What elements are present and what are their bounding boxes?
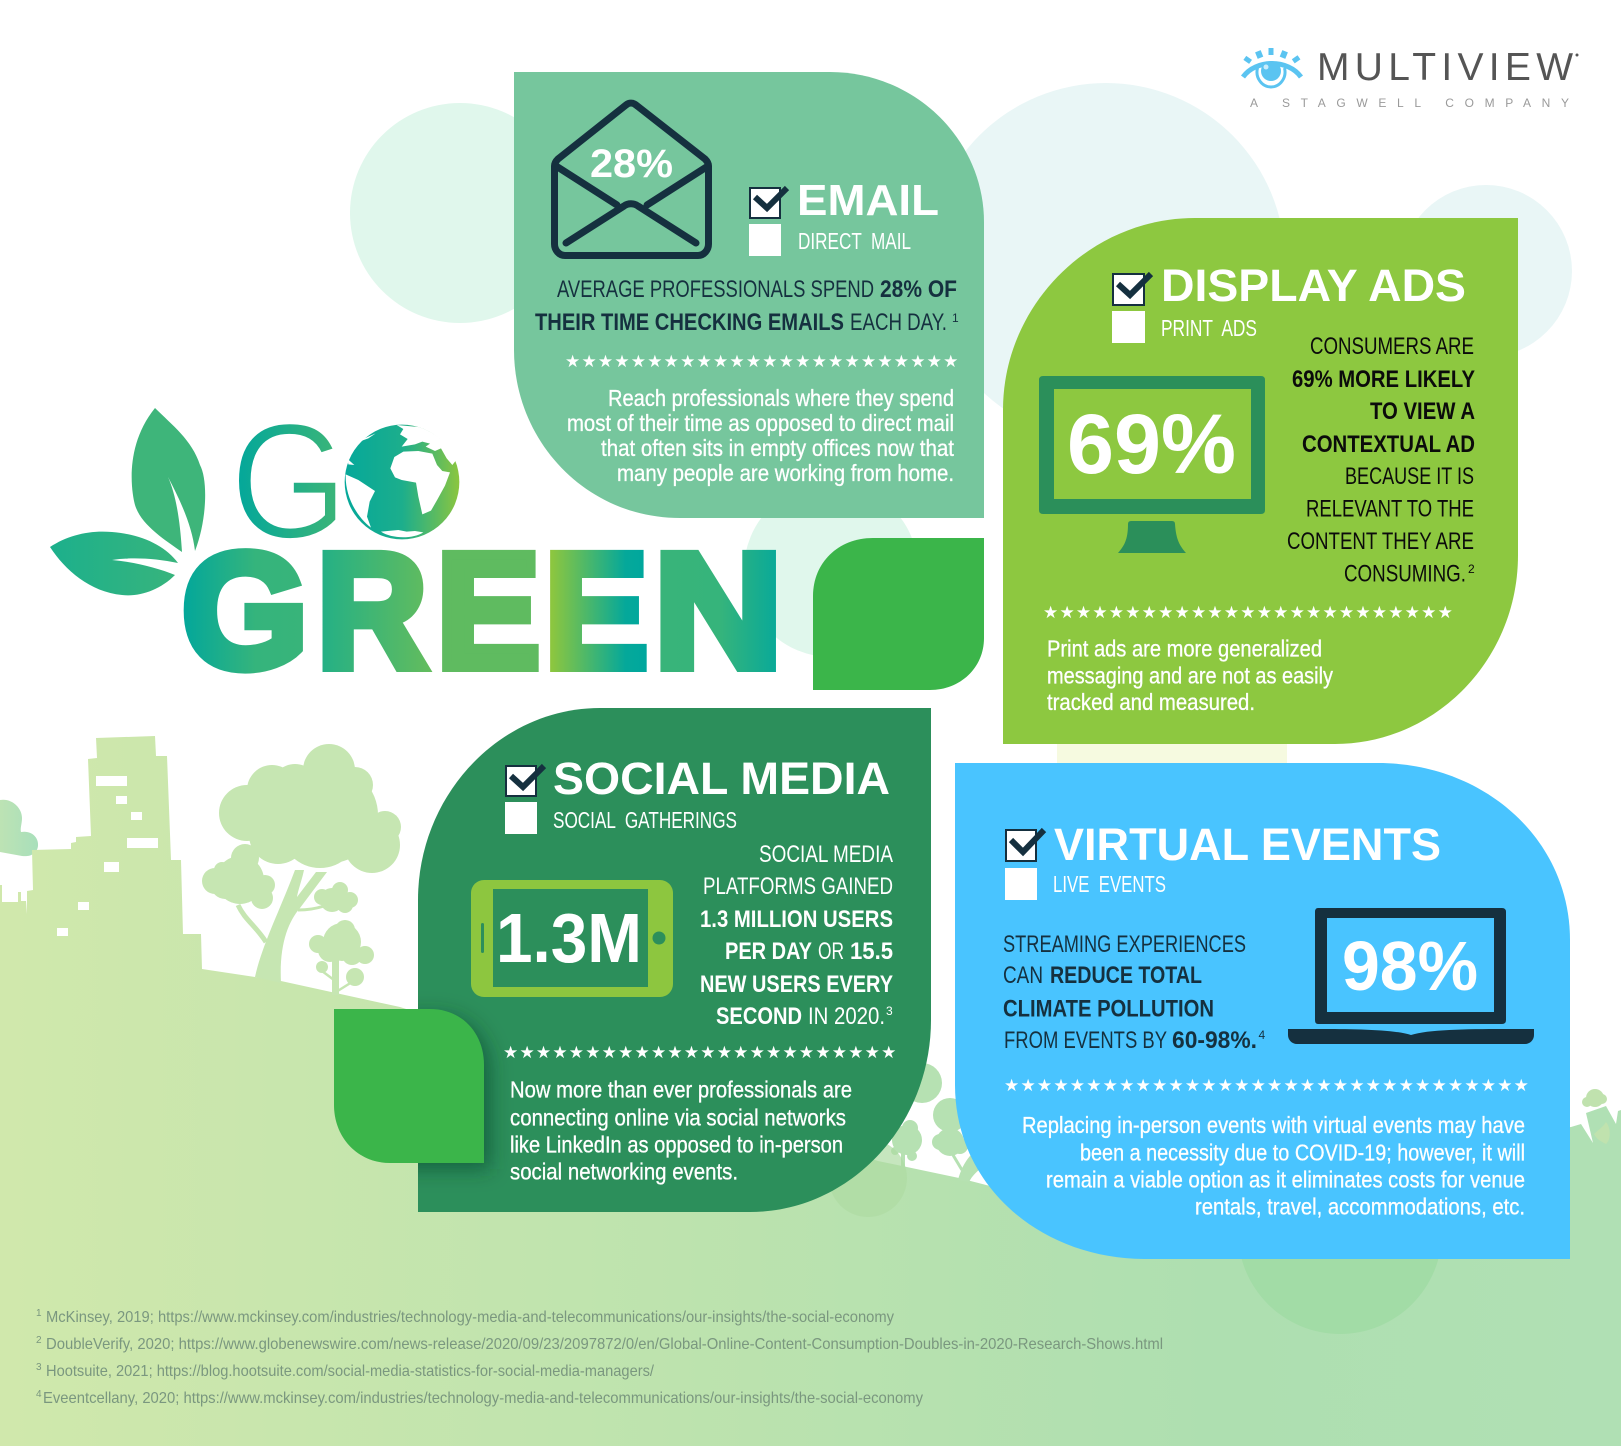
panel: display ads (1003, 218, 1518, 744)
panel: email (514, 72, 984, 518)
display stat text: CONTENT THEY ARE (1287, 528, 1474, 555)
footnotes (36, 1308, 1163, 1407)
email body text: most of their time as opposed to direct mail (567, 410, 954, 436)
virtual stat text (1003, 931, 1266, 1054)
icon: upper leaf (132, 408, 205, 552)
footnotes: 2 (36, 1335, 42, 1346)
checkbox empty (749, 224, 781, 256)
icon: monitor (1039, 376, 1265, 553)
panel: social media (418, 708, 931, 1212)
footnotes: Hootsuite, 2021; https://blog.hootsuite.com/social-media-statistics-for-social-media-managers/ (46, 1363, 655, 1380)
display stat text: RELEVANT TO THE (1306, 496, 1474, 522)
leaf shape (334, 1009, 484, 1163)
footnotes: 3 (36, 1362, 42, 1373)
virtual body text (1022, 1112, 1525, 1220)
icon: lower leaf (50, 532, 178, 595)
social body text: connecting online via social networks (510, 1104, 846, 1130)
icon: phone (471, 880, 673, 997)
checkbox empty (1005, 868, 1037, 900)
word: GREEN (182, 519, 782, 702)
footnotes: 1 (36, 1308, 42, 1319)
hill and buildings (0, 736, 1621, 1446)
trees right gap (887, 1063, 985, 1182)
heading: social media: SOCIAL MEDIA (553, 753, 890, 804)
phone stat: 1.3M (496, 899, 642, 977)
subheading: print ads: PRINT ADS (1161, 315, 1257, 341)
email body text (567, 385, 955, 486)
word: GREEN: R (317, 519, 427, 702)
social stat text: OR (818, 938, 844, 965)
trees right edge blobs (1582, 1089, 1610, 1144)
virtual body text: Replacing in-person events with virtual events may have (1022, 1112, 1525, 1138)
heading: email: EMAIL (797, 177, 939, 225)
hill circle bottom right (1238, 1130, 1442, 1334)
logo wordmark: MULTIVIEW (1317, 46, 1573, 89)
logo: Multiview (1243, 46, 1578, 110)
heading: display ads: DISPLAY ADS (1161, 260, 1466, 311)
social body text: social networking events. (510, 1158, 738, 1184)
social stat text: 3 (886, 1004, 893, 1018)
social stat text: NEW USERS EVERY (700, 971, 893, 998)
virtual stat text: FROM EVENTS BY (1004, 1027, 1167, 1054)
icon: envelope (554, 103, 708, 256)
display body text: messaging and are not as easily (1047, 662, 1333, 688)
word: GO letter G: G (230, 389, 348, 573)
icon: laptop (1288, 908, 1534, 1044)
social stat text: PER DAY (725, 938, 812, 965)
logo registered mark (1576, 54, 1578, 56)
social stat text (700, 841, 893, 1030)
stars divider: ★★★★★★★★★★★★★★★★★★★★★★★★★ (1043, 603, 1454, 623)
footnotes: DoubleVerify, 2020; https://www.globenewswire.com/news-release/2020/09/23/2097872/0/en/Global-Online-Content-Consumption-Doubles-in-2020-Research-Shows.html (46, 1336, 1163, 1353)
subheading: live events: LIVE EVENTS (1053, 871, 1166, 897)
virtual panel shape (955, 763, 1570, 1259)
checkbox checked (506, 766, 544, 796)
display stat text: 69% MORE LIKELY (1292, 366, 1475, 393)
email stat text: THEIR TIME CHECKING EMAILS (535, 309, 844, 336)
email stat text: AVERAGE PROFESSIONALS SPEND (557, 276, 874, 303)
email panel shape (514, 72, 984, 518)
subheading: social gatherings: SOCIAL GATHERINGS (553, 807, 737, 833)
email body text: Reach professionals where they spend (608, 385, 954, 411)
display body text (1047, 636, 1333, 715)
word: GREEN: N (654, 519, 782, 702)
email stat text (535, 276, 959, 336)
hill circles (829, 1139, 907, 1217)
checkbox empty (505, 802, 537, 834)
social stat text: IN 2020. (808, 1003, 885, 1030)
virtual stat text: REDUCE TOTAL (1050, 962, 1202, 989)
display body text: Print ads are more generalized (1047, 636, 1322, 662)
envelope stat: 28% (590, 142, 673, 186)
display stat text: BECAUSE IT IS (1345, 463, 1474, 490)
email body text: that often sits in empty offices now that (601, 435, 955, 461)
decorative leaf: lower green with shadow (334, 1009, 490, 1169)
virtual body text: been a necessity due to COVID-19; however, it will (1080, 1140, 1525, 1166)
laptop stat: 98% (1342, 927, 1478, 1005)
display body text: tracked and measured. (1047, 689, 1255, 715)
display stat text: CONSUMERS ARE (1310, 333, 1474, 360)
footnotes: 4 (36, 1389, 42, 1400)
monitor stat: 69% (1067, 397, 1236, 491)
social body text: Now more than ever professionals are (510, 1076, 852, 1102)
footnotes: Eveentcellany, 2020; https://www.mckinsey.com/industries/technology-media-and-telecommunications/our-insights/the-social-economy (43, 1390, 923, 1407)
panel: virtual events (955, 763, 1570, 1259)
social stat text: SOCIAL MEDIA (759, 841, 893, 868)
social stat text: PLATFORMS GAINED (703, 873, 893, 900)
social stat text: 15.5 (850, 938, 893, 965)
virtual body text: rentals, travel, accommodations, etc. (1195, 1194, 1525, 1220)
display stat text: TO VIEW A (1370, 398, 1475, 425)
stars divider: ★★★★★★★★★★★★★★★★★★★★★★★★ (565, 352, 960, 372)
email body text: many people are working from home. (617, 460, 954, 486)
email stat text: EACH DAY. (850, 309, 947, 336)
cloud tree at left edge (0, 800, 38, 856)
social stat text: 1.3 MILLION USERS (700, 906, 893, 933)
leaf shadow on social panel (418, 1006, 499, 1178)
checkbox empty (1112, 311, 1145, 343)
decorative leaf: upper green (813, 538, 984, 690)
checkbox checked (1006, 830, 1044, 861)
display stat text: 2 (1468, 562, 1475, 576)
word: GREEN: E (544, 519, 648, 702)
building windows (57, 776, 158, 936)
background circles (350, 83, 1572, 768)
virtual stat text: 4 (1258, 1028, 1266, 1042)
virtual stat text: 60-98%. (1172, 1027, 1257, 1054)
icon: globe (345, 425, 459, 539)
logo tagline: A STAGWELL COMPANY (1250, 96, 1569, 110)
stars divider: ★★★★★★★★★★★★★★★★★★★★★★★★ (503, 1043, 898, 1063)
social body text: like LinkedIn as opposed to in-person (510, 1132, 843, 1158)
display panel shape (1003, 218, 1518, 744)
email stat text: 1 (952, 311, 959, 325)
social body text (510, 1076, 852, 1184)
heading: virtual events: VIRTUAL EVENTS (1054, 819, 1441, 870)
landscape: city, hill and trees (0, 736, 1621, 1446)
virtual stat text: CLIMATE POLLUTION (1003, 996, 1214, 1022)
social panel shape (418, 708, 931, 1212)
trees left group (202, 744, 401, 995)
virtual stat text: CAN (1003, 962, 1043, 989)
checkbox checked (1113, 274, 1151, 305)
social stat text: SECOND (716, 1003, 802, 1030)
word: GREEN: G (182, 519, 308, 702)
icon: eye (1243, 48, 1301, 87)
display stat text: CONSUMING. (1344, 560, 1466, 588)
virtual stat text: STREAMING EXPERIENCES (1003, 931, 1246, 958)
checkbox checked (750, 188, 787, 218)
stars divider: ★★★★★★★★★★★★★★★★★★★★★★★★★★★★★★★★ (1004, 1076, 1530, 1096)
title: Go Green (50, 389, 782, 702)
word: GREEN: E (436, 519, 540, 702)
display stat text (1287, 333, 1475, 588)
email stat text: 28% OF (880, 276, 957, 303)
display stat text: CONTEXTUAL AD (1302, 431, 1475, 458)
virtual body text: remain a viable option as it eliminates costs for venue (1046, 1166, 1525, 1192)
subheading: direct mail: DIRECT MAIL (798, 228, 911, 254)
footnotes: McKinsey, 2019; https://www.mckinsey.com/industries/technology-media-and-telecommunications/our-insights/the-social-economy (46, 1309, 894, 1326)
